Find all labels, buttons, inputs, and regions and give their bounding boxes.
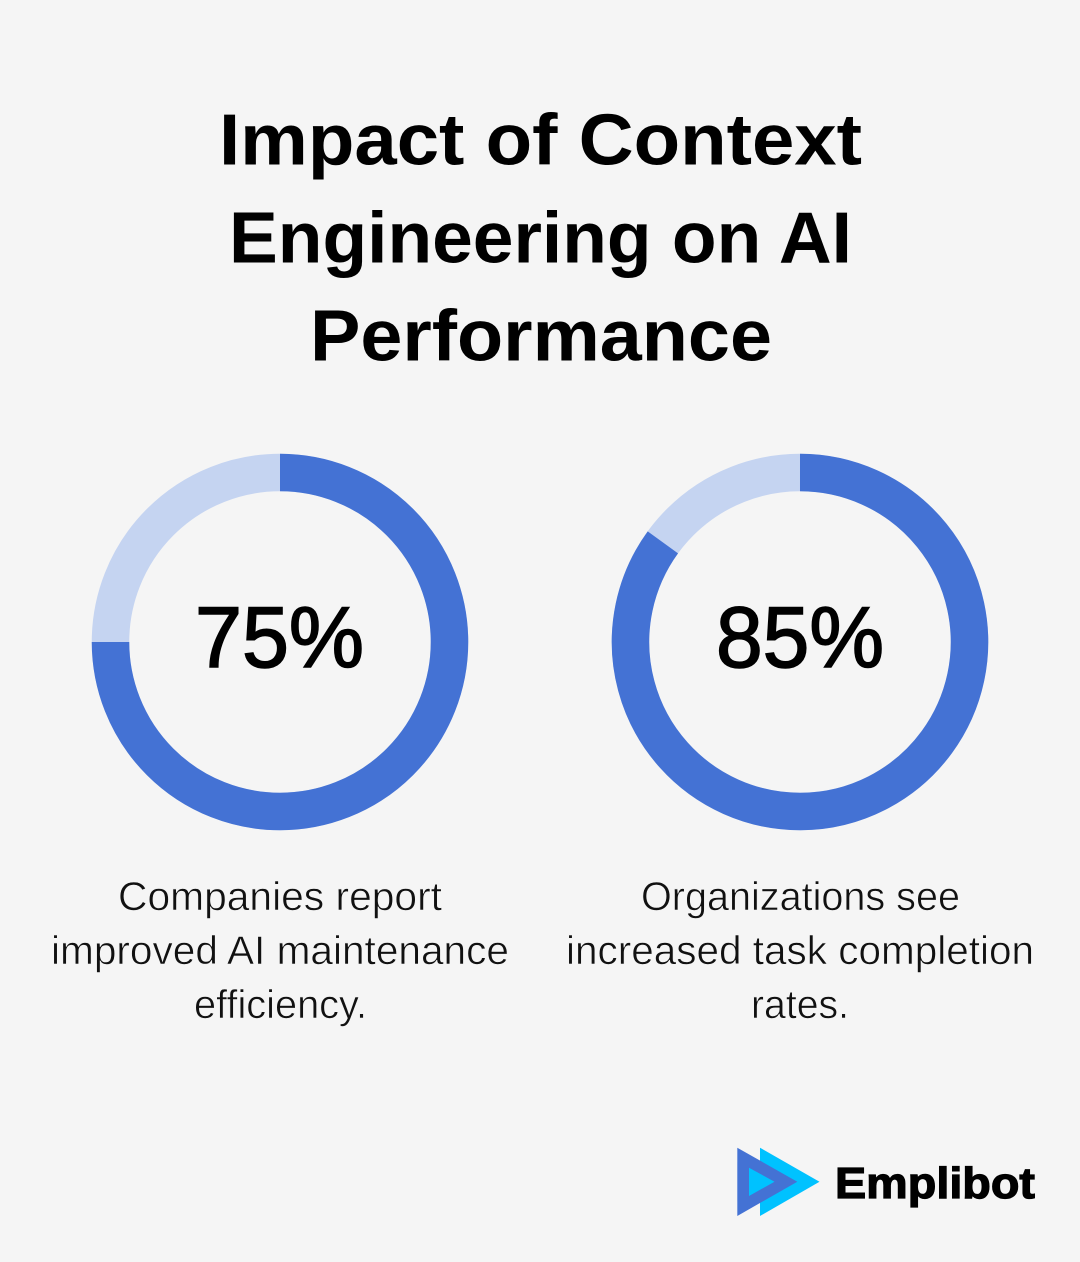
caption: maintenance efficiency: Companies report [118,875,442,919]
caption: task completion: increased task completion [566,929,1034,973]
title: Impact of Context [219,100,862,180]
title: Performance [310,296,772,376]
panel: 85% stat [566,472,1034,1027]
icon: play triangles [737,1148,820,1216]
value: 85%: 85% [716,590,884,686]
caption: task completion [566,875,1034,1027]
logo: Emplibot [737,1148,1035,1216]
title [219,100,862,376]
caption: maintenance efficiency: efficiency. [194,983,367,1027]
caption: maintenance efficiency: improved AI maintenance [51,929,509,973]
caption: task completion: Organizations see [641,875,960,919]
panel: 75% stat [51,472,509,1027]
donut chart: 75% [110,472,450,812]
logo wordmark: Emplibot [835,1159,1035,1208]
caption: maintenance efficiency [51,875,509,1027]
title: Engineering on AI [229,198,852,278]
value: 75%: 75% [195,590,364,686]
caption: task completion: rates. [751,983,849,1027]
donut chart: 85% [630,472,970,812]
